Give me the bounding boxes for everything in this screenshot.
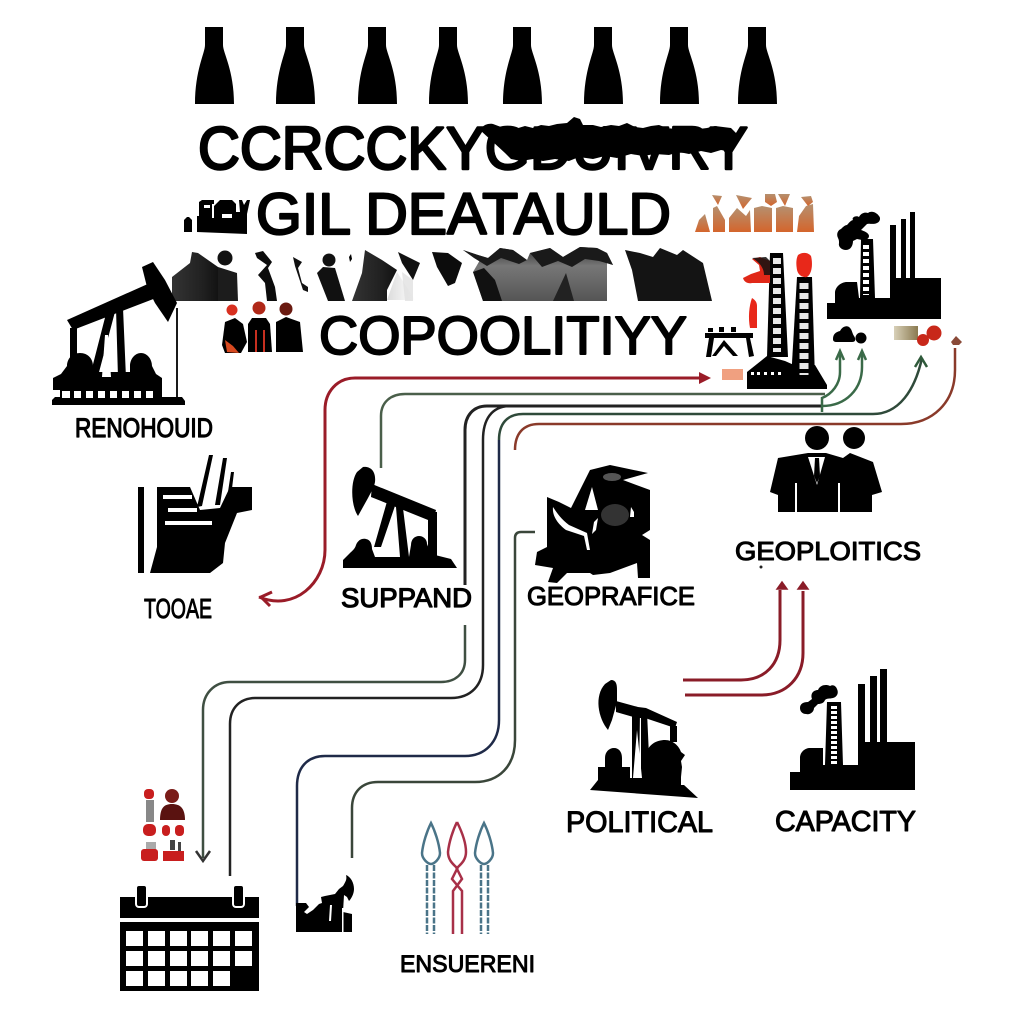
people icon with label: GEOPLOITICS [735, 536, 921, 566]
left pumpjack with label [52, 262, 213, 443]
pumpjack: political with label: POLITICAL [566, 806, 713, 839]
small smoke and flame blobs [833, 326, 962, 346]
connecting flow arrows [196, 348, 955, 906]
small pumpjack icon [296, 875, 354, 932]
calendar icon [120, 885, 259, 991]
match-like flame icons with label [400, 822, 535, 978]
book icon with label: TOOAE [144, 593, 212, 624]
green stems to smoke blobs [822, 351, 866, 412]
second long line [230, 440, 483, 876]
geopolitical map icon with label [527, 465, 695, 611]
derrick towers with flames [705, 253, 827, 389]
match-like flame icons with label: ENSUERENI [400, 951, 535, 978]
pumpjack: supply with label [341, 467, 472, 613]
first long trunk line [196, 406, 823, 861]
pumpjack: supply with label: SUPPAND [341, 583, 472, 613]
factory top right [827, 212, 941, 319]
red and black people cluster [141, 789, 185, 861]
third long navy line [499, 358, 922, 440]
silhouette band of figures [172, 247, 712, 301]
row of oil bottles [195, 27, 777, 104]
fourth brown line [515, 348, 955, 450]
title line 1: CCRCCKYGDUIVRY [198, 115, 748, 182]
factory: capacity with label: CAPACITY [775, 806, 916, 838]
geopolitical map icon with label: GEOPRAFICE [527, 581, 695, 611]
pumpjack: political with label [566, 680, 713, 839]
factory: capacity with label [775, 669, 916, 838]
title line 2 with small icons: GIL DEATAULD [256, 182, 671, 247]
left pumpjack with label: RENOHOUID [75, 413, 213, 443]
red arrow to towers [259, 372, 711, 606]
title line 4 with people: COPOOLITIYY [319, 306, 687, 366]
green line from supply up [381, 394, 825, 468]
book icon with label [138, 455, 252, 624]
title line 2 with small icons [184, 182, 814, 247]
people icon with label [735, 426, 921, 568]
red arrows to geopolitics [683, 582, 808, 695]
